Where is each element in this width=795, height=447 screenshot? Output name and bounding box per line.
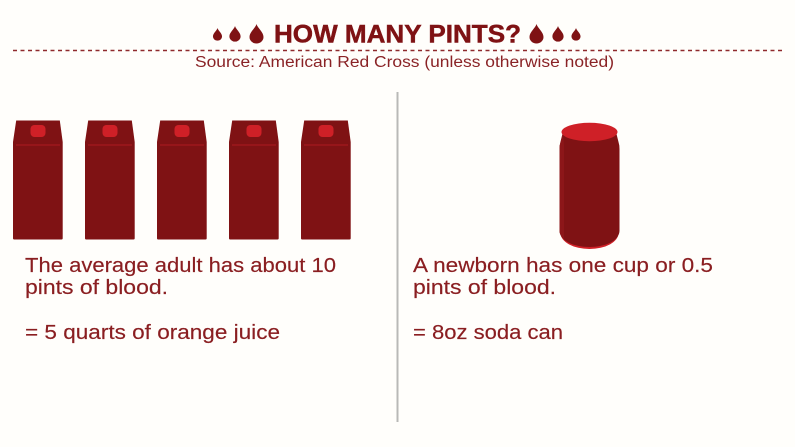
adult blood text <box>25 255 336 344</box>
panel: adult blood comparison <box>13 120 351 344</box>
adult blood text: pints of blood. <box>25 277 168 299</box>
newborn blood text <box>413 255 713 344</box>
icon: five orange juice cartons <box>13 120 351 240</box>
heading: HOW MANY PINTS? <box>274 20 521 48</box>
newborn blood text: pints of blood. <box>413 277 556 299</box>
source line: Source: American Red Cross (unless otherwise noted) <box>195 54 614 71</box>
newborn blood text: = 8oz soda can <box>413 322 563 344</box>
icon: left blood drops <box>213 24 264 44</box>
adult blood text: The average adult has about 10 <box>25 255 336 277</box>
title <box>213 20 581 48</box>
newborn blood text: A newborn has one cup or 0.5 <box>413 255 713 277</box>
panel: newborn blood comparison <box>413 123 713 344</box>
icon: soda can <box>560 123 620 249</box>
icon: right blood drops <box>530 24 581 44</box>
adult blood text: = 5 quarts of orange juice <box>25 322 280 344</box>
